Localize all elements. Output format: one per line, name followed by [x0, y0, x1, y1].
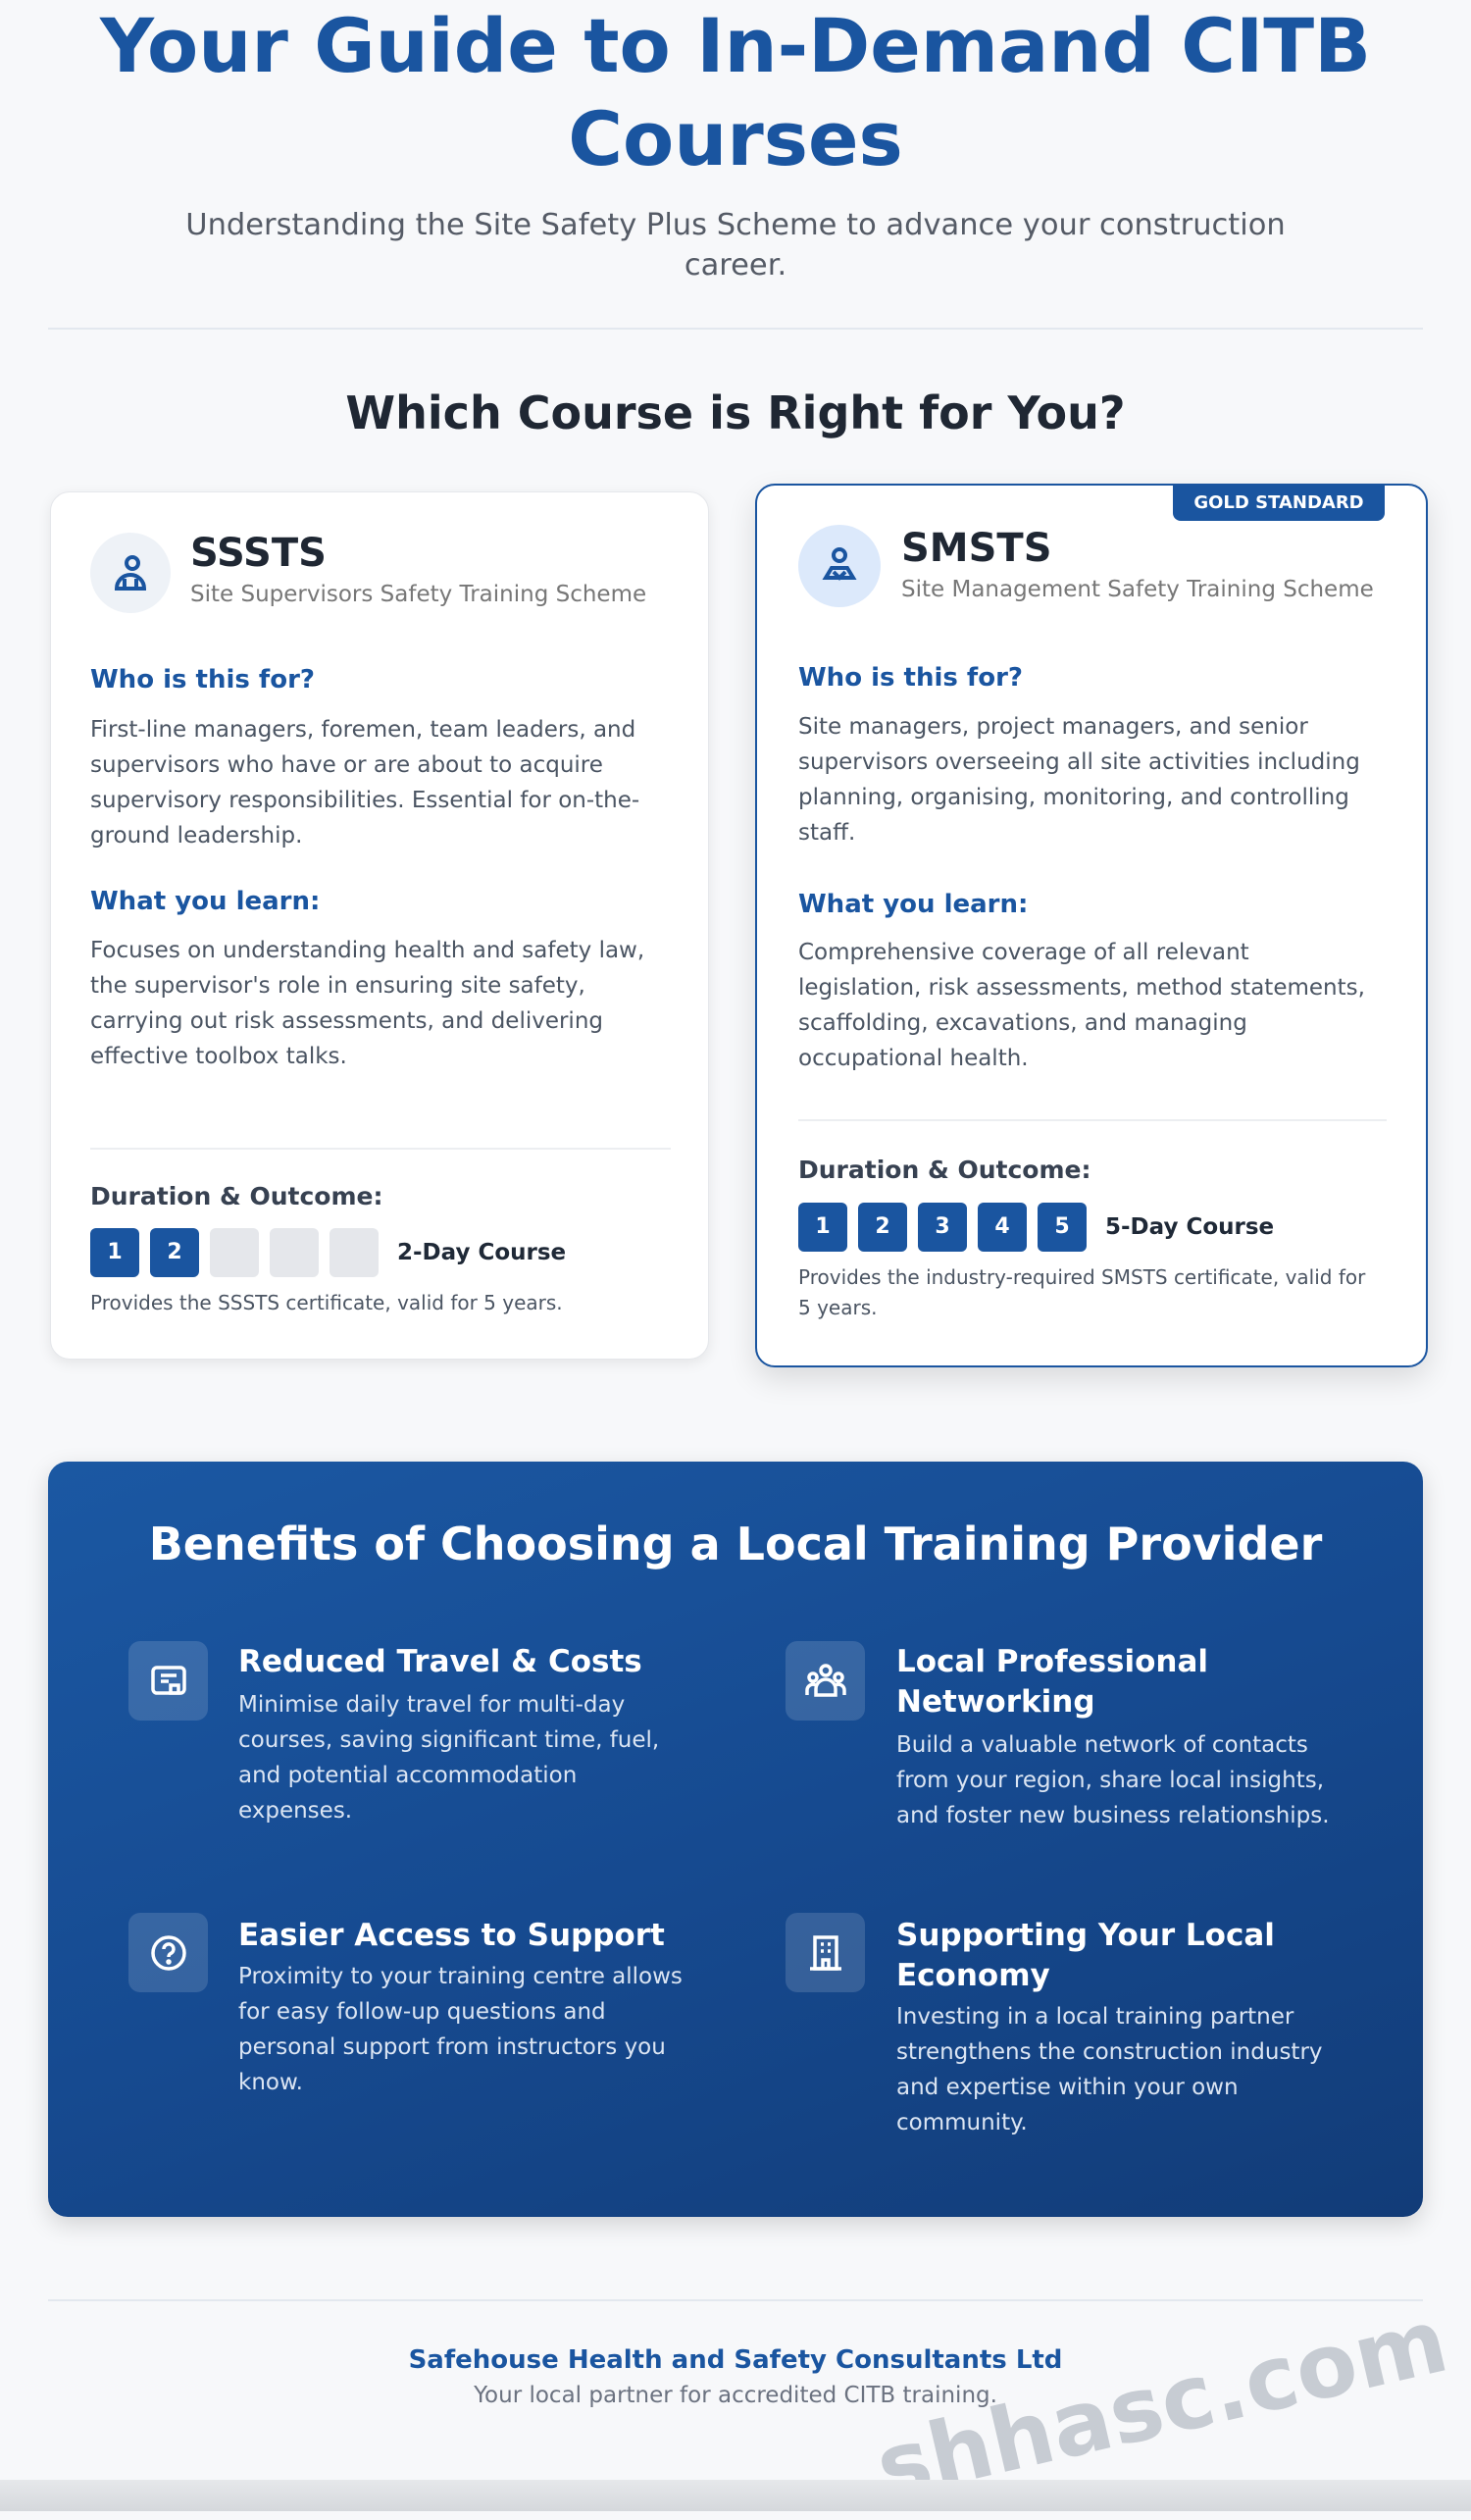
- benefit: support: Easier Access to Support: [238, 1918, 665, 1953]
- title: Courses: [568, 95, 903, 182]
- panel: SSSTS card: 2: [167, 1240, 182, 1264]
- title: Your Guide to In-Demand CITB: [100, 2, 1371, 89]
- duration: Duration & Outcome:: [798, 1156, 1091, 1184]
- panel: SMSTS card: 4: [994, 1214, 1010, 1239]
- course name: SMSTS: [901, 526, 1052, 571]
- panel: SMSTS card: Comprehensive coverage of all relevant legislation, risk assessments, method statements, scaffolding, excavations, and managing occupational health.: [798, 940, 1365, 1071]
- panel: SMSTS card: 3: [935, 1214, 950, 1239]
- panel: SSSTS card: Focuses on understanding health and safety law, the supervisor's role in ensuring site safety, carrying out risk assessments, and delivering effective toolbox talks.: [90, 938, 644, 1069]
- panel: SMSTS card: Site managers, project managers, and senior supervisors overseeing all site activities including planning, organising, monitoring, and controlling staff.: [798, 714, 1360, 846]
- benefit: networking: [786, 1641, 1330, 1828]
- panel: SMSTS card: Site Management Safety Training Scheme: [901, 577, 1374, 602]
- icon: people: [786, 1641, 865, 1721]
- benefit: economy: Supporting Your Local Economy: [896, 1918, 1275, 1993]
- benefit: networking: Build a valuable network of contacts from your region, share local insights, and foster new business relationships.: [896, 1732, 1330, 1828]
- icon: building: [786, 1913, 865, 1992]
- benefits heading: Benefits of Choosing a Local Training Provider: [149, 1517, 1322, 1570]
- panel: SSSTS card: First-line managers, foremen, team leaders, and supervisors who have or are about to acquire supervisory responsibilities. Essential for on-the-ground leadership.: [90, 717, 639, 849]
- watermark: shhasc.com: [867, 2289, 1456, 2520]
- footer: Your local partner for accredited CITB training.: [474, 2383, 997, 2408]
- who for: Who is this for?: [90, 665, 315, 694]
- icon: ticket: [128, 1641, 208, 1721]
- benefit: support: [128, 1913, 683, 2095]
- title: [99, 2, 1371, 182]
- footer: Safehouse Health and Safety Consultants Ltd: [409, 2345, 1062, 2375]
- what you learn: What you learn:: [798, 890, 1028, 919]
- benefit: economy: [786, 1913, 1323, 2135]
- panel: SMSTS card: 1: [815, 1214, 831, 1239]
- panel: SMSTS card: 5: [1054, 1214, 1070, 1239]
- panel: SMSTS card: [755, 484, 1428, 1367]
- panel: SMSTS card: Provides the industry-required SMSTS certificate, valid for 5 years.: [798, 1265, 1365, 1319]
- footer: [409, 2345, 1062, 2408]
- panel: SMSTS card: 5-Day Course: [1105, 1214, 1274, 1240]
- benefit: travel: Reduced Travel & Costs: [238, 1644, 642, 1679]
- panel: benefits: [48, 1462, 1423, 2217]
- benefit: travel: [128, 1641, 659, 1824]
- panel: SSSTS card: 1: [107, 1240, 123, 1264]
- badge: [1173, 486, 1385, 521]
- icon: supervisor: [90, 533, 171, 613]
- panel: SMSTS card: 2: [875, 1214, 890, 1239]
- course name: SSSTS: [190, 531, 327, 576]
- who for: Who is this for?: [798, 663, 1023, 693]
- panel: SSSTS card: Provides the SSSTS certificate, valid for 5 years.: [90, 1291, 563, 1314]
- panel: SSSTS card: [50, 491, 709, 1360]
- benefit: travel: Minimise daily travel for multi-day courses, saving significant time, fuel, and potential accommodation expenses.: [238, 1692, 659, 1824]
- icon: manager: [798, 525, 881, 607]
- badge: GOLD STANDARD: [1193, 492, 1364, 513]
- benefit: support: Proximity to your training centre allows for easy follow-up questions and personal support from instructors you know.: [238, 1964, 683, 2095]
- icon: question: [128, 1913, 208, 1992]
- subtitle: Understanding the Site Safety Plus Scheme to advance your construction career.: [185, 208, 1286, 283]
- section heading: Which Course is Right for You?: [345, 386, 1126, 439]
- benefit: networking: Local Professional Networking: [896, 1644, 1208, 1720]
- what you learn: What you learn:: [90, 887, 320, 916]
- duration: Duration & Outcome:: [90, 1182, 382, 1210]
- panel: SSSTS card: 2-Day Course: [397, 1240, 566, 1265]
- panel: SSSTS card: Site Supervisors Safety Training Scheme: [190, 582, 646, 607]
- benefit: economy: Investing in a local training partner strengthens the construction industry and expertise within your own community.: [896, 2004, 1323, 2135]
